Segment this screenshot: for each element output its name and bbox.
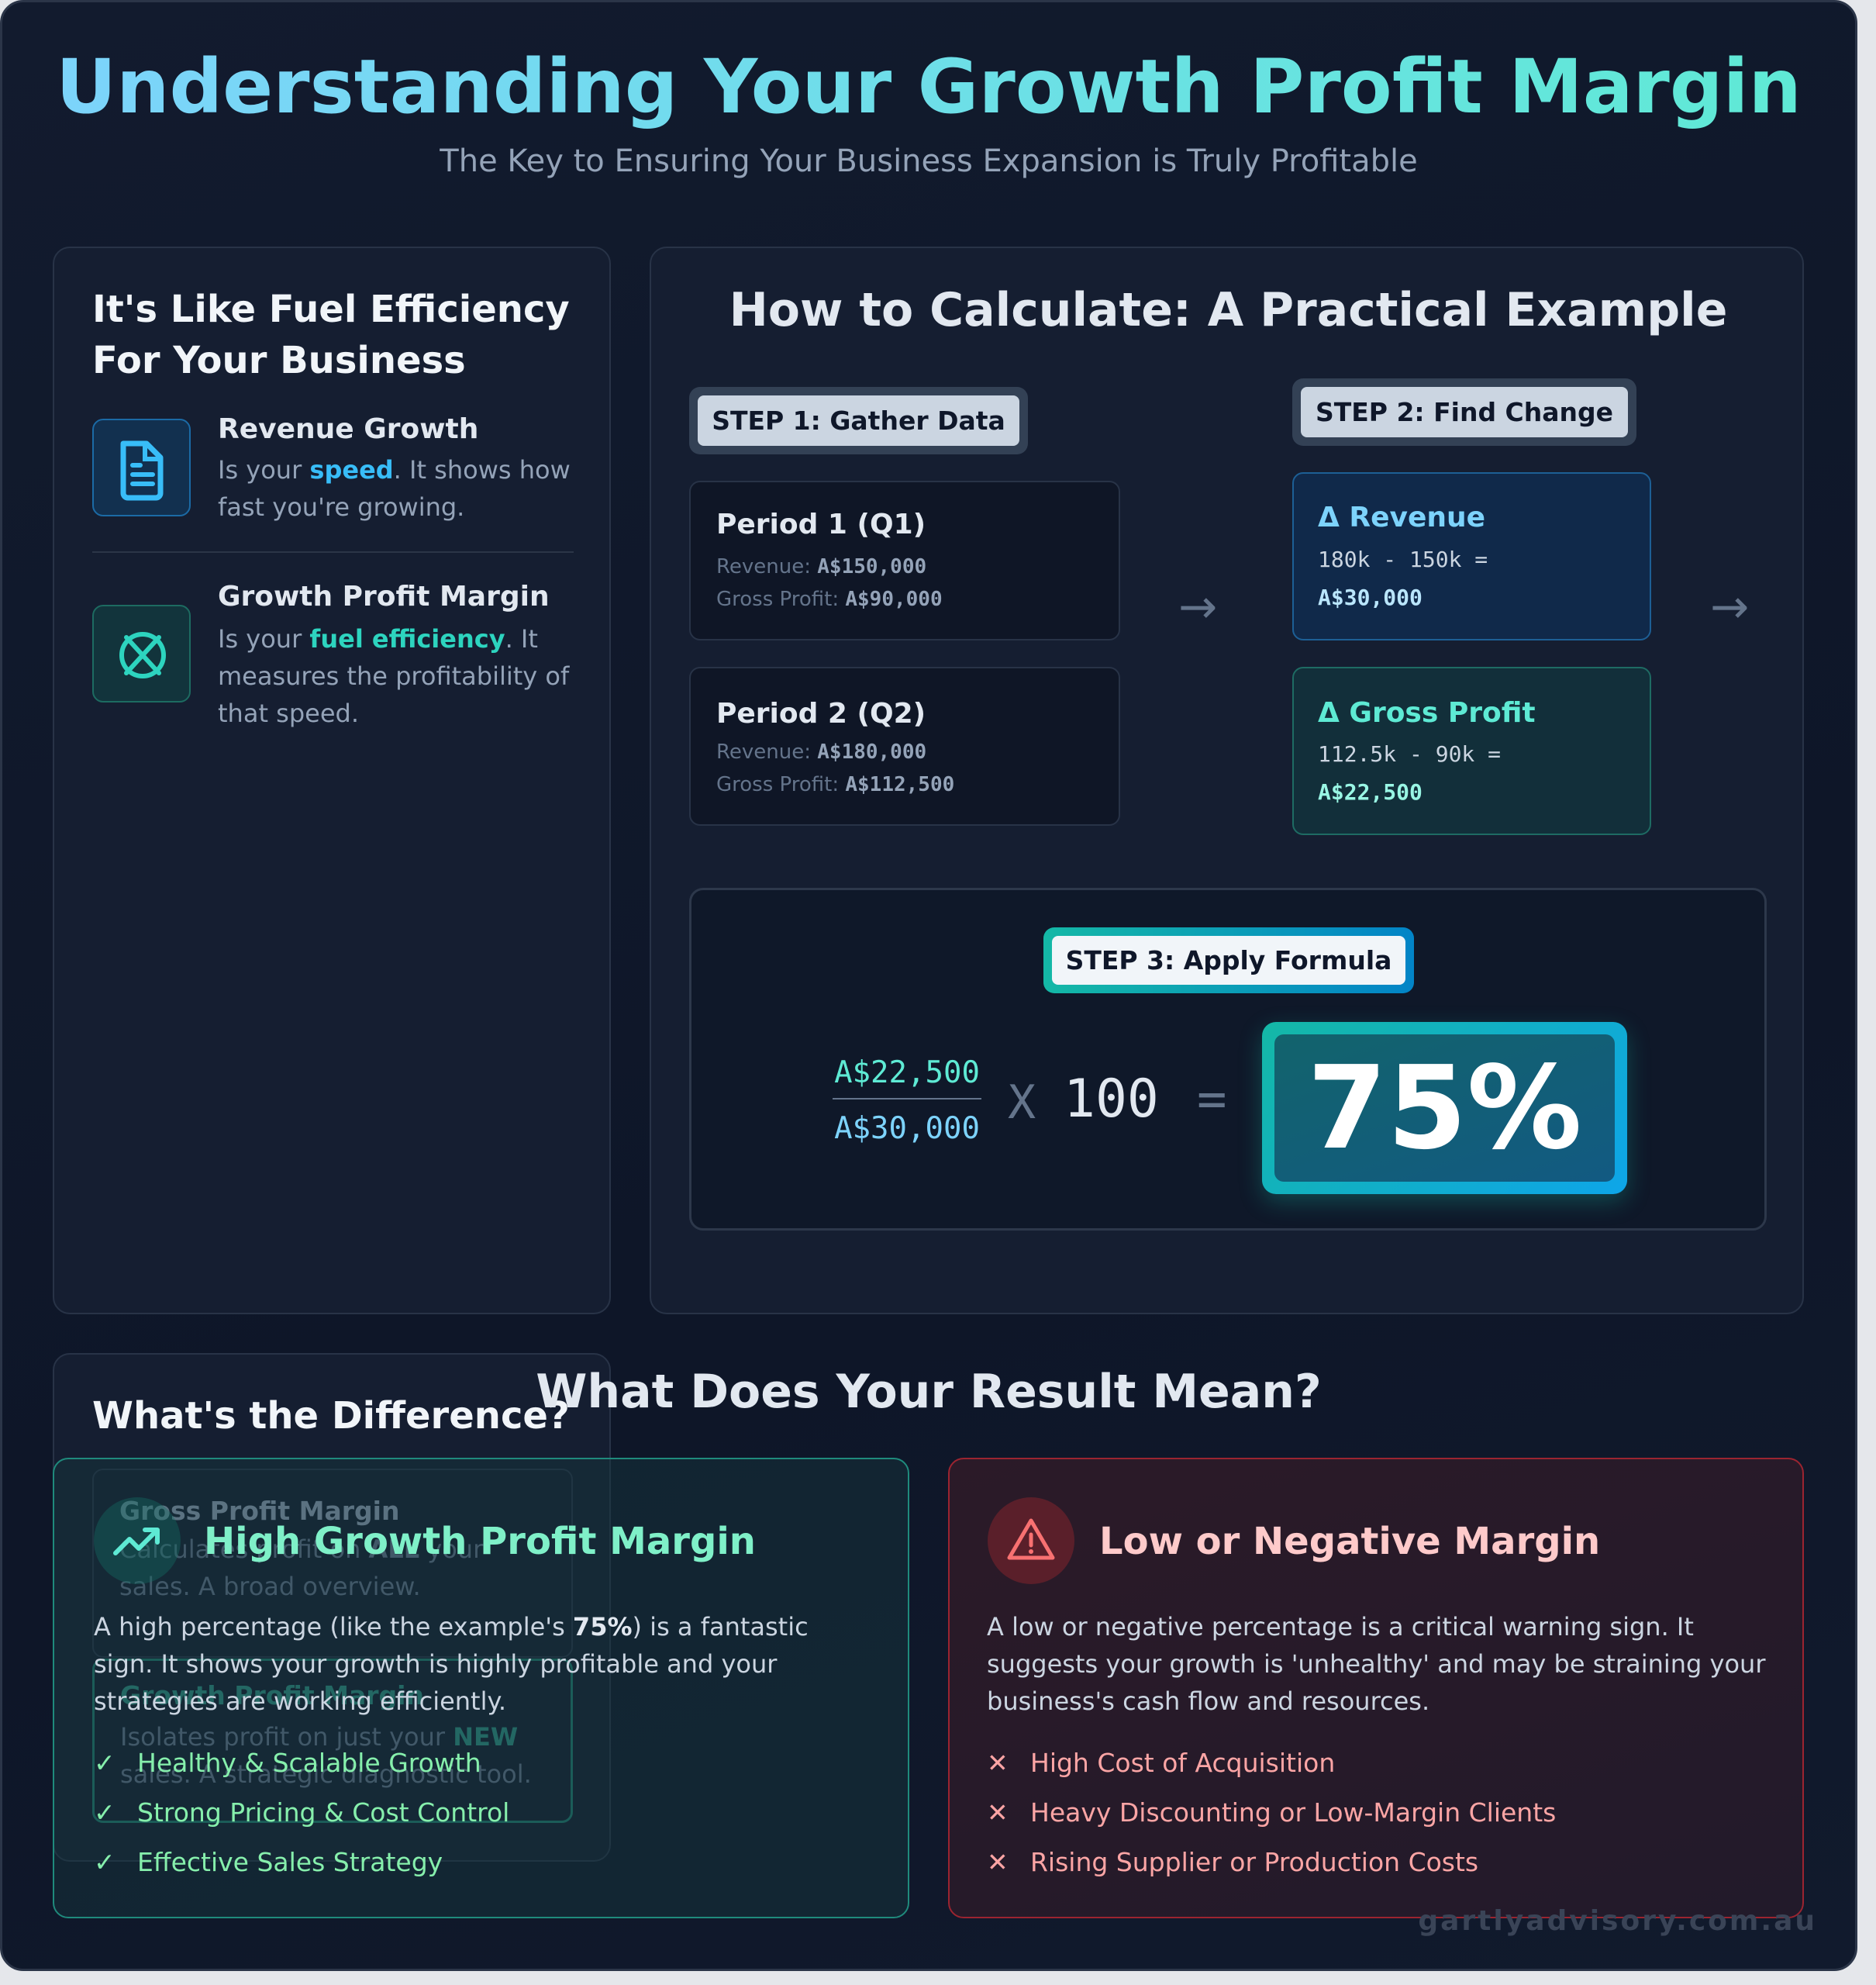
delta revenue: A$30,000: [1318, 585, 1423, 610]
icon: trend up: [94, 1497, 181, 1584]
period 2: Period 2 (Q2): [716, 698, 926, 730]
icon: warning: [988, 1497, 1074, 1584]
period 2: Revenue: A$180,000: [716, 740, 926, 764]
arrow 2: →: [1710, 580, 1749, 634]
x list: [987, 1748, 1556, 1877]
panel: calculation: [650, 247, 1804, 1314]
x list: Heavy Discounting or Low-Margin Clients: [1030, 1797, 1556, 1828]
result 75%: [1262, 1022, 1627, 1194]
delta gross profit: 112.5k - 90k =: [1318, 741, 1501, 767]
gross profit margin box: [92, 1469, 573, 1658]
x list: ✕: [987, 1847, 1009, 1877]
panel: fuel efficiency: measures the profitability of: [218, 661, 569, 691]
step 3 badge: [1043, 927, 1414, 993]
panel: low margin: [948, 1458, 1804, 1918]
checklist: ✓: [94, 1797, 116, 1828]
step 3 box: =: [1197, 1071, 1227, 1128]
checklist: Effective Sales Strategy: [137, 1847, 443, 1877]
paragraph: strategies are working efficiently.: [94, 1686, 506, 1716]
growth profit margin box: sales. A strategic diagnostic tool.: [120, 1759, 532, 1789]
icon: gauge: [92, 605, 191, 703]
heading: What's the Difference?: [92, 1394, 570, 1438]
panel: fuel efficiency: fast you're growing.: [218, 492, 464, 522]
text: revenue growth: Revenue Growth: [218, 413, 478, 445]
step 2 badge: [1292, 378, 1636, 446]
period 1: Revenue: A$150,000: [716, 555, 926, 578]
checklist: [94, 1748, 509, 1877]
delta gross profit: Δ Gross Profit: [1318, 697, 1536, 729]
checklist: Healthy & Scalable Growth: [137, 1748, 481, 1778]
text: growth profit margin: Growth Profit Margin: [218, 581, 550, 613]
step 1 badge: STEP 1: Gather Data: [712, 406, 1005, 436]
step 1 badge: [689, 387, 1028, 454]
period 1: Gross Profit: A$90,000: [716, 588, 943, 611]
delta gross profit: [1292, 667, 1651, 835]
heading: How to Calculate: A Practical Example: [729, 283, 1727, 337]
watermark: gartlyadvisory.com.au: [1418, 1905, 1817, 1937]
step 3 box: [689, 888, 1767, 1231]
paragraph: [987, 1612, 1766, 1716]
delta revenue: [1292, 472, 1651, 640]
panel: fuel efficiency: that speed.: [218, 699, 359, 728]
title: Understanding Your Growth Profit Margin: [56, 43, 1802, 130]
paragraph: business's cash flow and resources.: [987, 1686, 1429, 1716]
paragraph: [94, 1612, 809, 1716]
growth profit margin box: [92, 1659, 573, 1823]
panel: fuel efficiency: Is your speed. It shows how: [218, 455, 571, 485]
step 3 box: 100: [1064, 1068, 1159, 1130]
checklist: Strong Pricing & Cost Control: [137, 1797, 509, 1828]
x list: ✕: [987, 1797, 1009, 1828]
paragraph: sign. It shows your growth is highly profitable and your: [94, 1649, 777, 1679]
checklist: ✓: [94, 1847, 116, 1877]
paragraph: A high percentage (like the example's 75%) is a fantastic: [94, 1612, 809, 1642]
heading: [92, 288, 570, 382]
panel: fuel efficiency: [53, 247, 611, 1314]
growth profit margin box: Isolates profit on just your NEW: [120, 1722, 518, 1752]
arrow 1: →: [1178, 580, 1217, 634]
paragraph: A low or negative percentage is a critical warning sign. It: [987, 1612, 1694, 1642]
x list: Rising Supplier or Production Costs: [1030, 1847, 1478, 1877]
fraction: [833, 1055, 981, 1146]
period 2: [689, 667, 1120, 826]
period 1: Period 1 (Q1): [716, 509, 926, 540]
heading: For Your Business: [92, 339, 466, 382]
checklist: ✓: [94, 1748, 116, 1778]
multiply 100 equals: X: [1008, 1075, 1036, 1130]
step 2 badge: STEP 2: Find Change: [1316, 397, 1613, 427]
heading: result meaning: What Does Your Result Mean?: [536, 1365, 1322, 1419]
fraction: A$30,000: [834, 1111, 980, 1146]
gross profit margin box: Gross Profit Margin: [119, 1496, 399, 1526]
panel: high margin: [53, 1458, 909, 1918]
subtitle: The Key to Ensuring Your Business Expansion is Truly Profitable: [440, 143, 1418, 179]
title: High Growth Profit Margin: [204, 1520, 756, 1563]
growth profit margin box: Growth Profit Margin: [120, 1680, 424, 1711]
result 75%: 75%: [1307, 1041, 1582, 1175]
panel: fuel efficiency: Is your fuel efficiency. It: [218, 624, 538, 654]
gross profit margin box: Calculates profit on ALL your: [119, 1534, 483, 1564]
panel: difference: [53, 1353, 611, 1862]
title: Low or Negative Margin: [1099, 1520, 1600, 1563]
x list: High Cost of Acquisition: [1030, 1748, 1335, 1778]
heading: It's Like Fuel Efficiency: [92, 288, 570, 331]
delta revenue: 180k - 150k =: [1318, 547, 1488, 572]
delta gross profit: A$22,500: [1318, 779, 1423, 805]
paragraph: suggests your growth is 'unhealthy' and may be straining your: [987, 1649, 1765, 1679]
period 2: Gross Profit: A$112,500: [716, 773, 954, 796]
period 1: [689, 481, 1120, 640]
delta revenue: Δ Revenue: [1318, 502, 1485, 533]
gross profit margin box: sales. A broad overview.: [119, 1572, 421, 1601]
x list: ✕: [987, 1748, 1009, 1778]
fraction: A$22,500: [834, 1055, 980, 1090]
icon: document: [92, 419, 191, 516]
step 3 badge: STEP 3: Apply Formula: [1066, 945, 1391, 975]
